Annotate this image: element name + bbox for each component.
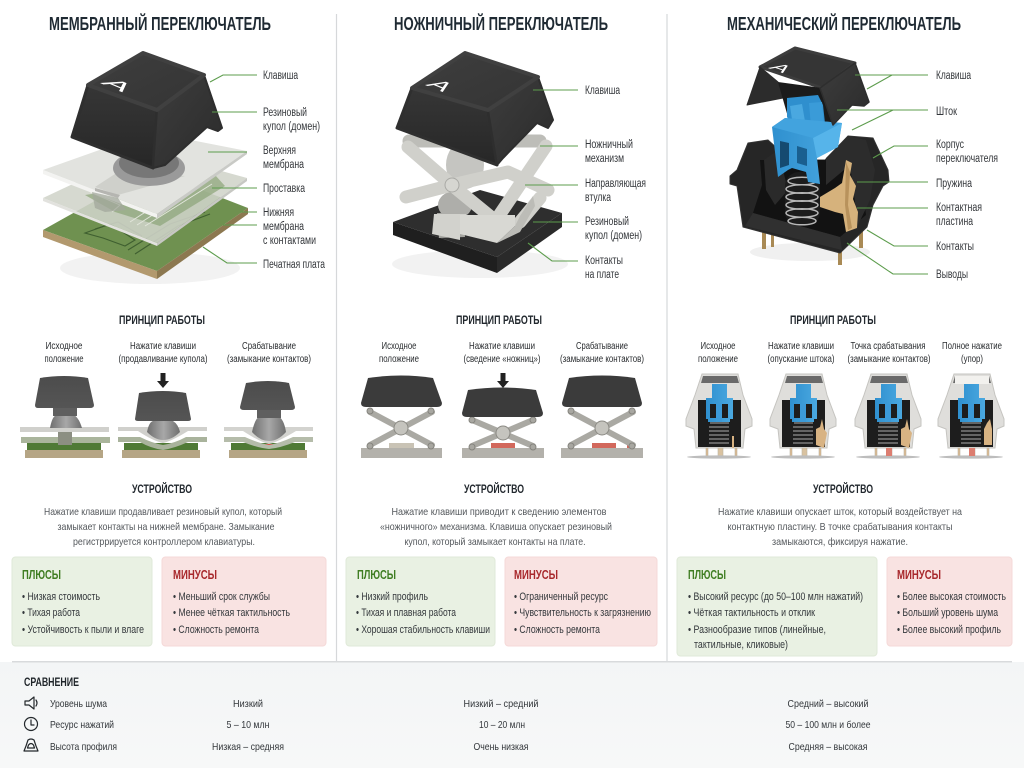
- panel: cons scissor: МИНУСЫ: [514, 567, 558, 582]
- illustration: cutaway mechanical switch: A: [764, 61, 797, 75]
- description: mechanical: Нажатие клавиши опускает шток, который воздействует на: [718, 506, 962, 518]
- heading: device: УСТРОЙСТВО: [464, 481, 524, 496]
- panel: comparison: [0, 661, 1024, 768]
- callouts: mechanical: Клавиша: [936, 70, 971, 82]
- panel: pros scissor: • Низкий профиль: [356, 591, 428, 603]
- description: membrane: регистррируется контроллером клавиатуры.: [73, 536, 255, 548]
- arrow: press: [497, 373, 509, 388]
- stage labels: (опускание штока): [768, 354, 834, 365]
- callouts: scissor: втулка: [585, 192, 611, 204]
- description: scissor: «ножничного» механизма. Клавиша опускает резиновый: [380, 521, 612, 533]
- callouts: mechanical: переключателя: [936, 153, 998, 165]
- description: mechanical: [718, 506, 962, 548]
- panel: pros mechanical: тактильные, кликовые): [694, 639, 788, 651]
- row: lifespan: [50, 719, 871, 731]
- callouts: membrane: Верхняя: [263, 145, 296, 157]
- icon: speaker: [25, 697, 37, 709]
- arrow: press: [157, 373, 169, 388]
- illustration: cutaway mechanical switch: [730, 48, 889, 265]
- description: scissor: купол, который замыкает контакты на плате.: [404, 536, 586, 548]
- callouts: membrane: мембрана: [263, 221, 304, 233]
- row: height: Низкая – средняя: [212, 741, 284, 753]
- heading: device: УСТРОЙСТВО: [132, 481, 192, 496]
- row: noise: Уровень шума: [50, 698, 107, 710]
- stage labels: (сведение «ножниц»): [464, 354, 540, 365]
- row: noise: Средний – высокий: [788, 698, 869, 710]
- callouts: scissor: Контакты: [585, 255, 623, 267]
- stage labels: [379, 340, 644, 365]
- title: membrane: МЕМБРАННЫЙ ПЕРЕКЛЮЧАТЕЛЬ: [49, 13, 271, 34]
- heading: how it works: ПРИНЦИП РАБОТЫ: [119, 313, 205, 327]
- callouts: scissor: Клавиша: [585, 85, 620, 97]
- description: mechanical: замыкаются, фиксируя нажатие.: [772, 536, 908, 548]
- description: membrane: замыкает контакты на нижней мембране. Замыкание: [58, 521, 275, 533]
- illustration: exploded scissor switch: [392, 53, 568, 278]
- row: noise: [50, 698, 869, 710]
- description: scissor: Нажатие клавиши приводит к сведению элементов: [392, 506, 607, 518]
- column dividers: [336, 14, 667, 661]
- stage 3: actuation: [224, 381, 313, 458]
- panel: pros mechanical: • Разнообразие типов (линейные,: [688, 624, 826, 636]
- callouts: membrane: купол (домен): [263, 121, 320, 133]
- panel: pros membrane: [12, 557, 152, 646]
- callouts: scissor: Ножничный: [585, 139, 633, 151]
- panel: cons scissor: • Чувствительность к загрязнению: [514, 607, 651, 619]
- stage labels: положение: [698, 354, 738, 365]
- row: height: [50, 741, 868, 753]
- illustration: exploded scissor switch: A: [420, 77, 460, 94]
- panel: pros scissor: • Тихая и плавная работа: [356, 607, 457, 619]
- panel: cons membrane: [162, 557, 326, 646]
- row: height: Высота профиля: [50, 741, 117, 753]
- callouts: scissor: механизм: [585, 153, 624, 165]
- stage labels: Срабатывание: [242, 340, 296, 352]
- row: height: Очень низкая: [474, 741, 528, 753]
- row: lifespan: 5 – 10 млн: [226, 719, 270, 731]
- stage labels: [698, 340, 1002, 365]
- callouts: scissor: купол (домен): [585, 230, 642, 242]
- callouts: membrane: [203, 70, 325, 271]
- heading: how it works: ПРИНЦИП РАБОТЫ: [456, 313, 542, 327]
- callouts: mechanical: Корпус: [936, 139, 964, 151]
- stage labels: (продавливание купола): [118, 354, 208, 365]
- illustration: exploded membrane switch: A: [95, 76, 140, 94]
- stage labels: Полное нажатие: [942, 341, 1002, 352]
- panel: cons scissor: • Ограниченный ресурс: [514, 591, 608, 603]
- stage labels: Исходное: [382, 341, 417, 352]
- callouts: membrane: мембрана: [263, 159, 304, 171]
- description: scissor: [380, 506, 612, 548]
- stage 2: pressed: [462, 373, 544, 458]
- stage labels: положение: [379, 354, 419, 365]
- stage labels: [44, 340, 311, 365]
- panel: cons scissor: • Сложность ремонта: [514, 624, 601, 636]
- icon: keycap profile: [24, 739, 38, 751]
- callouts: scissor: Направляющая: [585, 178, 646, 190]
- stage labels: (замыкание контактов): [227, 354, 311, 365]
- stage 4: bottom out: [938, 374, 1004, 459]
- row: lifespan: Ресурс нажатий: [50, 719, 114, 731]
- stage 3: actuation point: [855, 374, 921, 459]
- panel: cons mechanical: [887, 557, 1012, 646]
- callouts: membrane: Нижняя: [263, 207, 294, 219]
- callouts: mechanical: пластина: [936, 216, 973, 228]
- callouts: mechanical: [837, 70, 998, 281]
- callouts: scissor: [525, 85, 646, 281]
- callouts: mechanical: Выводы: [936, 269, 968, 281]
- row: lifespan: 10 – 20 млн: [479, 719, 525, 731]
- panel: pros mechanical: [677, 557, 877, 656]
- panel: cons mechanical: • Больший уровень шума: [897, 607, 999, 619]
- heading: device: УСТРОЙСТВО: [813, 481, 873, 496]
- description: membrane: [44, 506, 282, 548]
- row: noise: Низкий – средний: [464, 698, 539, 710]
- panel: pros mechanical: • Чёткая тактильность и отклик: [688, 607, 815, 619]
- callouts: mechanical: Пружина: [936, 178, 972, 190]
- stage labels: Нажатие клавиши: [768, 341, 834, 352]
- stage labels: (упор): [961, 354, 983, 365]
- icon: clock: [24, 718, 38, 730]
- panel: cons scissor: [505, 557, 657, 646]
- callouts: membrane: Печатная плата: [263, 259, 325, 271]
- panel: pros mechanical: • Высокий ресурс (до 50–100 млн нажатий): [688, 591, 863, 603]
- illustration: exploded membrane switch: [43, 53, 248, 284]
- panel: pros mechanical: ПЛЮСЫ: [688, 567, 726, 582]
- stage labels: Исходное: [46, 341, 83, 352]
- row: noise: Низкий: [233, 698, 263, 710]
- column: membrane switch: [12, 13, 326, 646]
- panel: cons membrane: • Сложность ремонта: [173, 624, 260, 636]
- panel: pros scissor: [346, 557, 495, 646]
- row: height: Средняя – высокая: [788, 741, 868, 753]
- panel: cons membrane: • Меньший срок службы: [173, 591, 270, 603]
- stage labels: положение: [44, 354, 84, 365]
- stage 2: key down: [770, 374, 836, 459]
- stage labels: Нажатие клавиши: [130, 341, 196, 352]
- panel: pros scissor: ПЛЮСЫ: [357, 567, 396, 582]
- callouts: membrane: Резиновый: [263, 107, 307, 119]
- callouts: membrane: Проставка: [263, 183, 305, 195]
- stage labels: Нажатие клавиши: [469, 341, 535, 352]
- stage labels: Исходное: [700, 341, 736, 352]
- description: mechanical: контактную пластину. В точке срабатывания контакты: [728, 521, 952, 533]
- panel: cons membrane: • Менее чёткая тактильность: [173, 607, 290, 619]
- callouts: mechanical: Шток: [936, 106, 958, 118]
- panel: cons mechanical: МИНУСЫ: [897, 567, 941, 582]
- description: membrane: Нажатие клавиши продавливает резиновый купол, который: [44, 506, 282, 518]
- panel: pros membrane: • Устойчивость к пыли и влаге: [22, 624, 144, 636]
- stage 1: resting: [686, 374, 752, 459]
- callouts: mechanical: Контактная: [936, 202, 982, 214]
- callouts: membrane: Клавиша: [263, 70, 298, 82]
- stage labels: (замыкание контактов): [560, 354, 644, 365]
- column: mechanical switch: [677, 13, 1012, 656]
- column: scissor switch: [346, 13, 657, 646]
- callouts: scissor: на плате: [585, 269, 619, 281]
- panel: pros scissor: • Хорошая стабильность клавиши: [356, 624, 490, 636]
- panel: cons membrane: МИНУСЫ: [173, 567, 217, 582]
- stage 1: resting: [20, 376, 110, 458]
- stage 2: pressed: [118, 373, 207, 458]
- callouts: scissor: Резиновый: [585, 216, 629, 228]
- panel: pros membrane: ПЛЮСЫ: [22, 567, 61, 582]
- stage 3: actuation: [561, 376, 643, 458]
- title: scissor: НОЖНИЧНЫЙ ПЕРЕКЛЮЧАТЕЛЬ: [394, 13, 608, 34]
- heading: comparison: СРАВНЕНИЕ: [24, 675, 79, 689]
- panel: pros membrane: • Тихая работа: [22, 607, 81, 619]
- stage labels: Точка срабатывания: [850, 340, 926, 352]
- heading: how it works: ПРИНЦИП РАБОТЫ: [790, 313, 876, 327]
- panel: pros membrane: • Низкая стоимость: [22, 591, 100, 603]
- stage labels: Срабатывание: [576, 340, 628, 352]
- stage labels: (замыкание контактов): [848, 354, 930, 365]
- callouts: mechanical: Контакты: [936, 241, 974, 253]
- row: lifespan: 50 – 100 млн и более: [786, 719, 871, 731]
- callouts: membrane: с контактами: [263, 235, 316, 247]
- stage 1: resting: [361, 376, 442, 458]
